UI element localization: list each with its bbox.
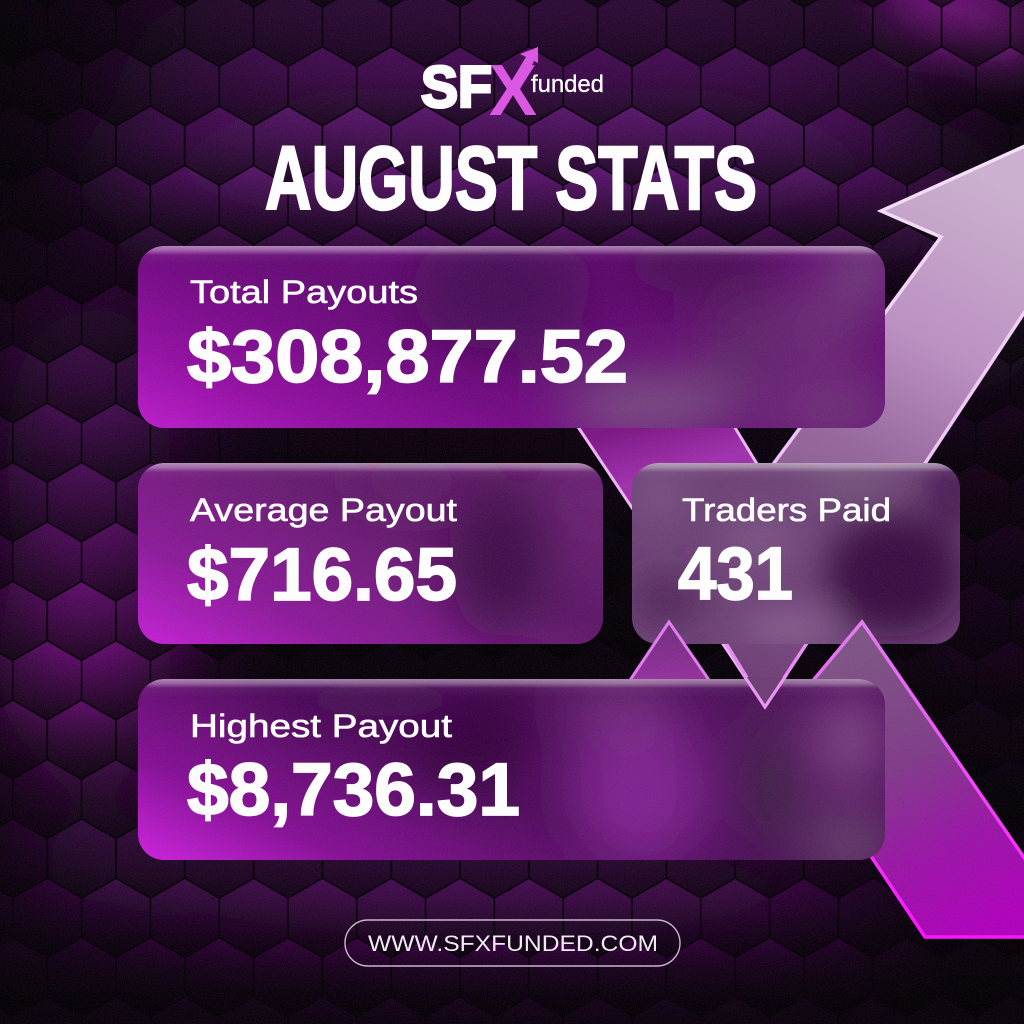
logo: SFX funded: [421, 47, 604, 131]
website pill: [345, 920, 680, 966]
panel: traders paid: [632, 463, 960, 644]
title: AUGUST STATS: [265, 129, 757, 229]
panel: total payouts: [138, 246, 885, 428]
value: average payout: $716.65: [187, 533, 457, 616]
panel: average payout: [138, 463, 603, 644]
label: total payouts: Total Payouts: [190, 274, 418, 310]
value: highest payout: $8,736.31: [187, 748, 520, 831]
website url: WWW.SFXFUNDED.COM: [368, 931, 658, 956]
panel: highest payout: [138, 678, 896, 870]
icon: logo arrow: [506, 47, 538, 97]
arrow: down-left arm of the X: [540, 370, 800, 707]
arrow: v-shaped tip over the panel: [743, 674, 787, 707]
label: average payout: Average Payout: [190, 492, 457, 528]
label: highest payout: Highest Payout: [190, 708, 452, 744]
logo word: SF: SF: [421, 55, 492, 120]
arrow: large upward arrow: [690, 137, 1024, 707]
arrow: left peak: [600, 622, 740, 725]
arrow: lower right arm: [780, 622, 1024, 937]
logo word: funded: funded: [531, 71, 604, 98]
value: total payouts: $308,877.52: [187, 315, 628, 398]
logo letter: X: X: [489, 51, 537, 131]
value: traders paid: 431: [678, 532, 793, 615]
label: traders paid: Traders Paid: [682, 492, 891, 528]
